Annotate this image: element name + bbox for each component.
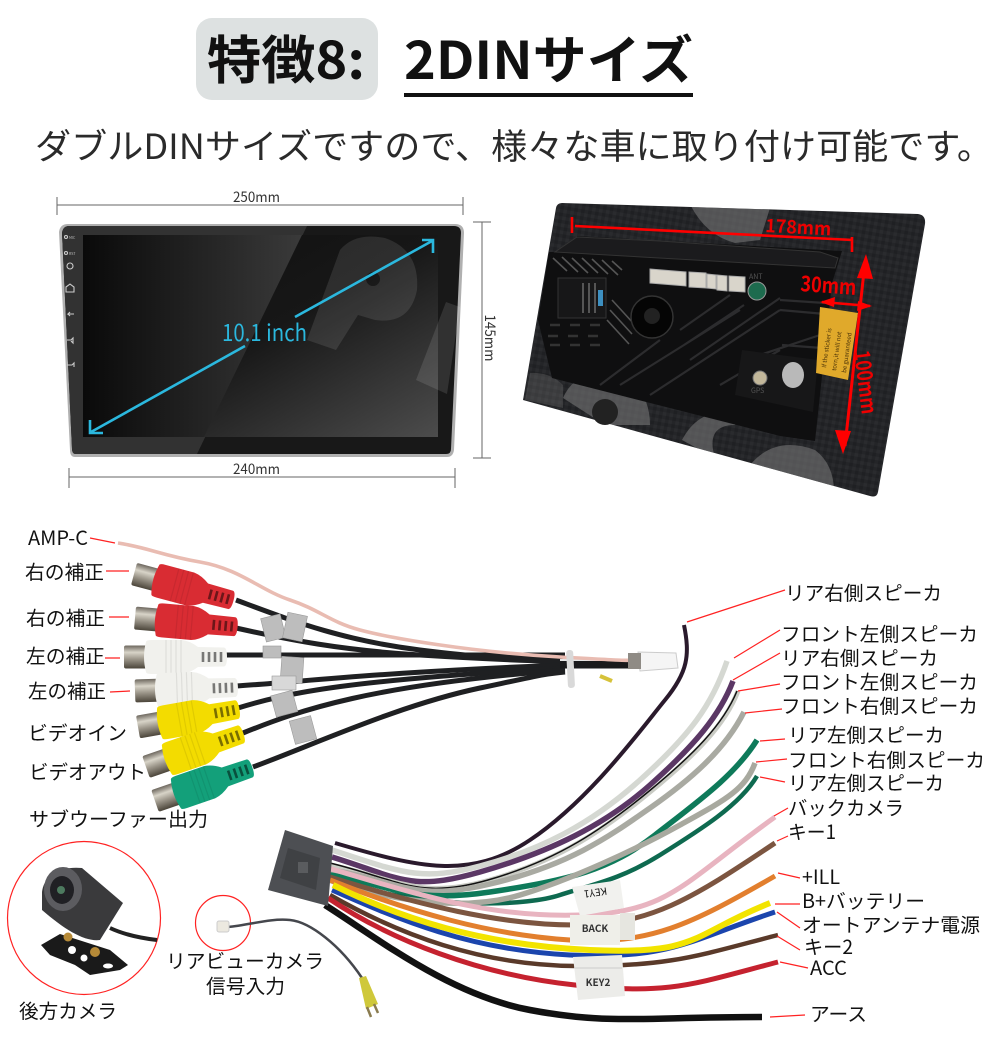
dimension 178mm: 178mm	[765, 212, 832, 241]
panel: rear camera in circle	[8, 842, 160, 994]
dimension 240mm: 240mm	[233, 459, 280, 479]
right wire labels: リア左側スピーカ	[788, 767, 944, 796]
camera housing	[42, 868, 123, 940]
warranty sticker: torn,it will not	[829, 330, 844, 371]
panel: rear view camera input	[196, 896, 378, 1017]
watermark shapes	[525, 204, 834, 495]
GPS plate	[735, 350, 818, 412]
right wire labels: キー2	[804, 931, 853, 960]
right wire labels: B+バッテリー	[802, 885, 925, 914]
camera labels: 後方カメラ	[19, 995, 117, 1024]
right wire labels: フロント右側スピーカ	[781, 690, 978, 719]
tag KEY1	[572, 880, 624, 916]
signal cable	[228, 920, 362, 978]
right wire labels: フロント左側スピーカ	[781, 618, 978, 647]
white plug 2	[134, 670, 239, 708]
lower wires	[325, 817, 778, 1019]
dimension 100mm: 100mm	[847, 348, 885, 416]
title badge: 特徴8:	[207, 19, 365, 94]
right wire labels: アース	[810, 998, 867, 1027]
red leader lines	[90, 538, 808, 1017]
button captions	[69, 236, 76, 257]
AMP-C pink wire	[118, 543, 640, 660]
bundle to plug	[560, 660, 640, 664]
dimension 240mm	[69, 459, 455, 488]
small white connector	[217, 921, 229, 932]
small multi-pin connector	[600, 652, 678, 681]
left harness socket	[558, 278, 606, 318]
right wire labels: リア右側スピーカ	[781, 642, 938, 671]
white plug	[124, 640, 227, 674]
green antenna socket	[748, 272, 766, 300]
right wire labels: リア右側スピーカ	[785, 577, 942, 606]
black RCA cables	[226, 600, 565, 767]
tag KEY2: KEY2	[586, 974, 610, 989]
red plug	[130, 558, 238, 617]
right wire labels: キー1	[788, 816, 836, 845]
tag BACK: BACK	[582, 920, 608, 935]
vent holes	[548, 325, 600, 345]
upper wires	[320, 625, 757, 903]
hatched corner	[553, 257, 634, 344]
warranty sticker: be guaranteed	[839, 332, 854, 373]
right wire labels: フロント右側スピーカ	[788, 744, 985, 773]
side buttons	[64, 236, 74, 367]
red circle	[196, 896, 250, 950]
mount bracket	[41, 934, 128, 975]
watermark letter	[307, 236, 417, 350]
left cable labels: 左の補正	[28, 675, 106, 704]
left cable labels: サブウーファー出力	[29, 803, 208, 832]
left cable labels	[25, 522, 208, 832]
right wire labels: フロント左側スピーカ	[781, 666, 978, 695]
red circle	[8, 842, 160, 994]
cable tie	[566, 650, 575, 688]
left cable labels: ビデオイン	[28, 717, 127, 746]
mount screws	[64, 932, 100, 957]
tag BACK	[570, 913, 635, 945]
red plug 2	[134, 601, 239, 644]
tag KEY2	[573, 955, 625, 1000]
dimension 250mm: 250mm	[233, 187, 280, 207]
warranty sticker: If the sticker is	[819, 327, 834, 368]
GPS plate: GPS	[751, 386, 764, 396]
subtitle: ダブルDINサイズですので、様々な車に取り付け可能です。	[35, 119, 993, 170]
right wire labels: +ILL	[802, 861, 840, 890]
title main text: 2DINサイズ	[404, 19, 693, 94]
panel: RCA cable bundle	[118, 543, 678, 817]
button captions: MIC	[69, 236, 76, 241]
panel: speaker and power harness	[268, 625, 778, 1019]
green plug	[149, 751, 258, 817]
white connectors	[650, 269, 745, 292]
screen body	[59, 224, 464, 457]
slots	[600, 295, 825, 395]
size arrow 10.1 inch: 10.1 inch	[222, 314, 307, 348]
panel: rear chassis with dimensions	[523, 203, 925, 496]
display area	[83, 235, 438, 437]
dimension 145mm	[473, 222, 500, 458]
cooling fan	[631, 296, 673, 338]
camera labels	[19, 945, 324, 1024]
size arrow 10.1 inch	[90, 240, 433, 433]
top rail	[555, 237, 838, 268]
left cable labels: 右の補正	[26, 602, 105, 631]
left cable labels: AMP-C	[28, 522, 88, 551]
right wire labels: バックカメラ	[788, 792, 904, 821]
right wire labels: リア左側スピーカ	[788, 719, 944, 748]
right wire labels	[781, 577, 985, 1027]
button captions: RST	[69, 252, 76, 257]
left cable labels: ビデオアウト	[29, 756, 146, 785]
dimension 100mm	[835, 254, 885, 454]
tag KEY1: KEY1	[583, 884, 608, 902]
carbon back plate	[523, 203, 925, 496]
panel: front screen with dimensions	[57, 187, 500, 488]
dimension 145mm: 145mm	[480, 314, 500, 362]
dimension 30mm: 30mm	[800, 268, 857, 302]
harness connector	[268, 830, 333, 906]
yellow RCA plug	[359, 976, 378, 1017]
metal chassis	[538, 236, 842, 441]
yellow plug	[135, 692, 242, 744]
lens	[44, 867, 82, 911]
silver cable tags	[261, 612, 317, 744]
dimension 178mm	[572, 212, 853, 252]
title	[196, 18, 693, 100]
green antenna socket: ANT	[749, 272, 763, 282]
yellow plug 2	[140, 717, 249, 783]
right wire labels: ACC	[810, 952, 847, 981]
left cable labels: 右の補正	[25, 556, 104, 585]
camera labels: 信号入力	[206, 970, 285, 999]
left cable labels: 左の補正	[26, 640, 105, 669]
dimension 250mm	[57, 187, 463, 215]
warranty sticker	[816, 307, 858, 380]
right wire labels: オートアンテナ電源	[802, 909, 980, 938]
camera labels: リアビューカメラ	[166, 945, 324, 974]
camera cable	[110, 928, 157, 940]
